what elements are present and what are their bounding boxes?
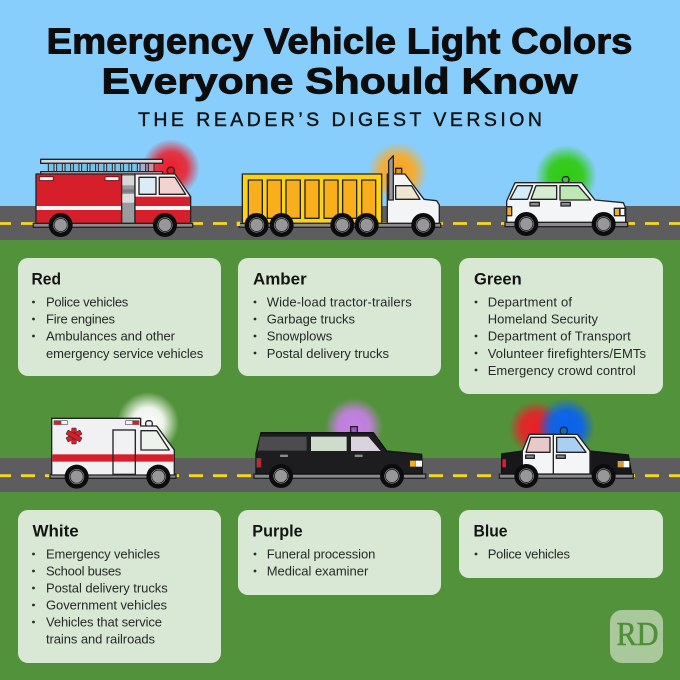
ambulance	[50, 418, 176, 489]
title: Emergency Vehicle Light Colors	[46, 20, 632, 62]
list: red: emergency service vehicles	[46, 346, 204, 361]
bottom road	[0, 458, 680, 492]
list: green: Emergency crowd control	[488, 363, 636, 378]
top road	[0, 206, 680, 240]
list: white: Postal delivery trucks	[46, 580, 168, 595]
grass background	[0, 240, 680, 680]
list: amber: Garbage trucks	[267, 312, 356, 326]
heading: blue: Blue	[474, 522, 508, 540]
police red light glow	[509, 401, 563, 455]
hearse	[254, 427, 426, 488]
list: purple	[254, 546, 375, 578]
list: green: Department of Transport	[488, 329, 631, 344]
list: green: Department of	[488, 294, 572, 309]
amber tractor-trailer	[237, 156, 441, 237]
panel: red	[18, 258, 221, 376]
list: red: Police vehicles	[46, 294, 129, 309]
panel: blue	[459, 510, 663, 578]
police blue light glow	[537, 398, 595, 456]
green light glow	[535, 145, 597, 207]
list: red: Ambulances and other	[46, 329, 176, 344]
green-light SUV	[505, 177, 628, 236]
white light glow	[117, 392, 179, 454]
logo: RD	[610, 610, 663, 663]
title: Everyone Should Know	[102, 60, 578, 102]
panel: purple	[238, 510, 441, 595]
list: white	[32, 546, 168, 646]
list: white: Emergency vehicles	[46, 546, 160, 561]
list: green: Volunteer firefighters/EMTs	[488, 346, 646, 361]
list: purple: Medical examiner	[267, 563, 369, 578]
heading: amber: Amber	[253, 270, 307, 289]
police car	[499, 427, 633, 488]
panel: green	[459, 258, 663, 394]
list: white: Vehicles that service	[46, 614, 162, 629]
list: blue: Police vehicles	[488, 546, 570, 561]
list: green: Homeland Security	[488, 312, 598, 326]
list: amber: Snowplows	[267, 329, 333, 344]
purple light glow	[325, 398, 383, 456]
red light glow	[142, 139, 200, 197]
heading: white: White	[32, 522, 79, 540]
heading: green: Green	[474, 270, 522, 289]
list: purple: Funeral procession	[267, 546, 375, 561]
list: red	[32, 294, 204, 361]
icon: star of life	[66, 428, 82, 444]
list: white: Government vehicles	[46, 597, 168, 612]
list: white: trains and railroads	[46, 631, 156, 646]
panel: amber	[238, 258, 441, 376]
heading: purple: Purple	[252, 522, 303, 540]
title	[46, 20, 632, 102]
list: red: Fire engines	[46, 312, 116, 326]
list: amber	[254, 294, 412, 361]
list: amber: Postal delivery trucks	[267, 346, 390, 361]
subtitle: THE READER’S DIGEST VERSION	[138, 109, 542, 131]
logo: RD: RD	[616, 616, 658, 653]
fire engine	[33, 159, 193, 237]
panel: white	[18, 510, 221, 663]
list: green	[475, 294, 646, 378]
amber light glow	[368, 142, 428, 202]
list: amber: Wide-load tractor-trailers	[267, 294, 412, 309]
list: white: School buses	[46, 563, 122, 578]
sky background	[0, 0, 680, 206]
heading: red: Red	[32, 270, 61, 289]
